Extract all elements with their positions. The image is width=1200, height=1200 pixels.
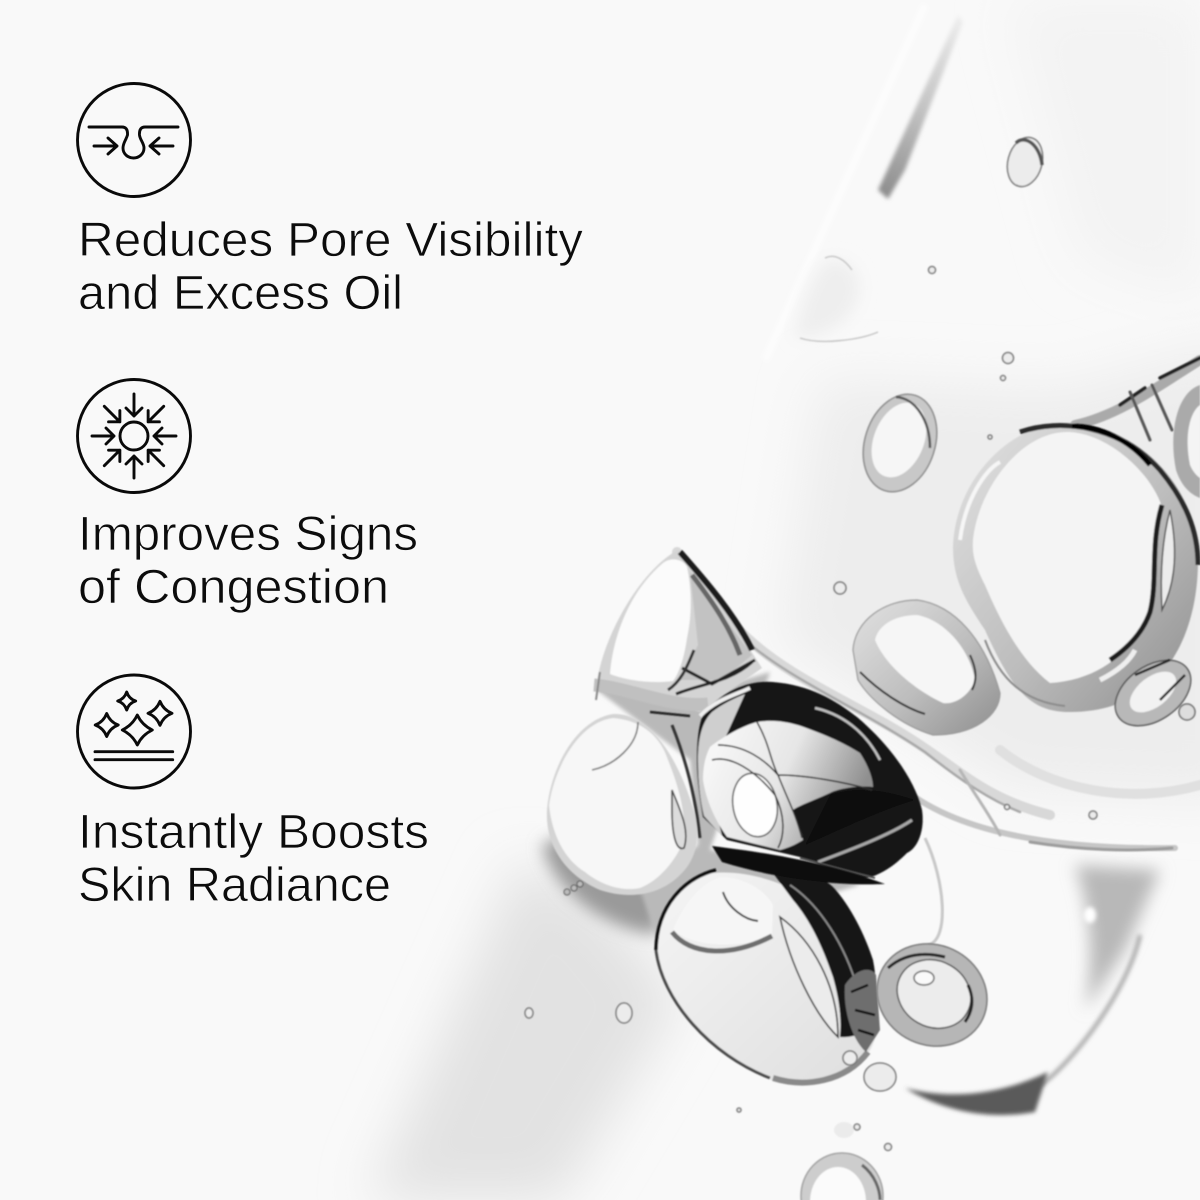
- bottom droplet: [801, 1153, 883, 1200]
- dark central bubble: [697, 682, 923, 880]
- small bubble lower right of large bubble: [1103, 647, 1200, 739]
- photo: glass dropper with serum bubbles: [370, 0, 1200, 1200]
- text: improves signs of congestion: Improves Signs: [78, 508, 418, 561]
- left round bubble: [547, 714, 700, 895]
- icon: circle with converging arrows: [78, 380, 190, 492]
- bubble cut by right edge: [1173, 385, 1200, 498]
- small bubble left of large bubble: [853, 600, 1000, 735]
- top triangular bubble: [594, 550, 762, 716]
- lower large bubble: [655, 846, 885, 1083]
- glass streak near top: [795, 15, 963, 341]
- text: improves signs of congestion: of Congestion: [78, 561, 389, 614]
- dropper tube soft shading: [370, 0, 1200, 1200]
- large upper bubble: [953, 423, 1198, 712]
- benefit 3: radiance: [78, 675, 429, 912]
- oval bubble: [851, 385, 949, 501]
- meniscus surface lines: [677, 358, 1200, 850]
- text: instantly boosts skin radiance: Instantly Boosts: [78, 806, 429, 859]
- text: reduces pore visibility: and Excess Oil: [78, 267, 403, 320]
- cluster backing joining bubbles: [597, 672, 860, 945]
- tiny floating droplets: [525, 133, 1097, 1151]
- icon: sparkles over skin lines: [78, 675, 190, 788]
- text: instantly boosts skin radiance: Skin Radiance: [78, 859, 391, 912]
- benefit 2: congestion: [78, 380, 418, 614]
- small round ringed bubble: [860, 926, 1004, 1064]
- lower right faint bubble and dark wedge: [905, 838, 1160, 1115]
- icon: pore with inward arrows: [78, 84, 190, 196]
- text: reduces pore visibility: Reduces Pore Visibility: [78, 214, 583, 267]
- benefit 1: pore visibility: [78, 84, 583, 320]
- soft shadow under cluster: [542, 835, 660, 935]
